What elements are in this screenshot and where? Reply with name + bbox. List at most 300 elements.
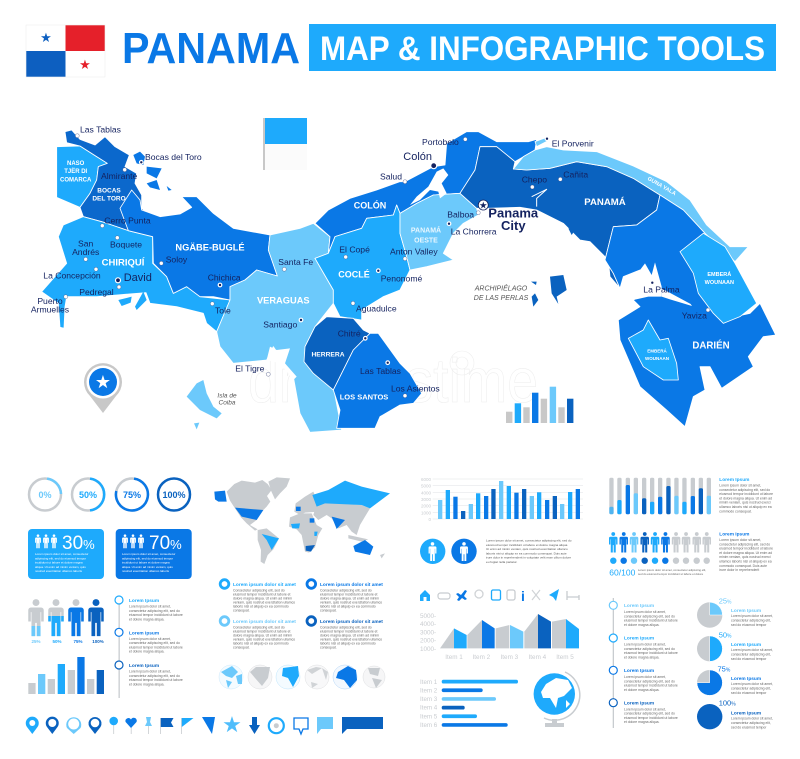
city labels: Aguadulce — [356, 304, 397, 314]
province labels: DARIÉN — [692, 341, 730, 352]
legend 3: laboris nisi ut aliquip ex ea commodo — [233, 642, 289, 646]
text block: people: minim veniam, quis nostrud exerci — [719, 555, 771, 559]
timeline right: eiusmod tempor incididunt ut labore — [624, 651, 678, 655]
province: Cocle — [315, 205, 410, 320]
city labels: Colón — [403, 151, 432, 163]
city labels: Soloy — [166, 255, 188, 265]
horizontal bar chart: Item 2 — [420, 688, 438, 694]
city labels: Yaviza — [682, 311, 707, 321]
pie 75: consectetur adipiscing elit, — [731, 687, 771, 691]
panel: 70 percent: Lorem ipsum dolor sit amet, consectetur — [122, 552, 175, 556]
pie 75 — [697, 664, 773, 695]
text block: people: ullamco laboris nisi ut aliquip ex ea — [719, 560, 772, 564]
icon: light speech bubble — [317, 717, 333, 734]
province: Ngabe-Bugle — [120, 190, 277, 300]
timeline right: Lorem Ipsum — [624, 700, 654, 706]
legend 2 — [307, 580, 383, 612]
globe 4 — [305, 665, 329, 689]
title banner: map and infographic tools: MAP & INFOGRAPHIC TOOLS — [320, 30, 765, 68]
pie 75: Lorem ipsum dolor sit amet, — [731, 682, 773, 686]
pie 100: Lorem Ipsum — [731, 710, 761, 716]
legend 4: laboris nisi ut aliquip ex ea commodo — [320, 642, 376, 646]
city labels: DE LAS PERLAS — [474, 295, 529, 302]
capital marker: Panama City: ★ — [479, 200, 488, 212]
province labels: NGÄBE-BUGLÉ — [175, 243, 245, 253]
legend 1: consequat. — [233, 608, 250, 612]
city labels: Boquete — [110, 239, 142, 249]
legend 1: dolore magna aliqua. Ut enim ad minim — [233, 596, 292, 600]
icon: pin 4 — [88, 717, 101, 734]
timeline right: eiusmod tempor incididunt ut labore — [624, 619, 678, 623]
column chart top middle: 3000 — [421, 497, 431, 502]
timeline right: eiusmod tempor incididunt ut labore — [624, 684, 678, 688]
islands — [118, 152, 575, 429]
text block: capsule bars: ullamco laboris nisi ut aliquip ex ea — [719, 505, 772, 509]
timeline left: Lorem ipsum dolor sit amet, — [129, 670, 171, 674]
legend 4: veniam, quis nostrud exercitation ullamco — [320, 638, 382, 642]
timeline left: eiusmod tempor incididunt ut labore — [129, 678, 183, 682]
text block: capsule bars: Lorem Ipsum — [719, 477, 749, 483]
people percentage chart: 75% — [73, 639, 83, 644]
timeline left: et dolore magna aliqua. — [129, 682, 164, 686]
horizontal bar chart: Item 3 — [420, 696, 438, 703]
city labels: Chepo — [522, 174, 547, 184]
city labels: Chitré — [338, 329, 361, 339]
city labels: ARCHIPIÉLAGO — [474, 284, 528, 293]
timeline left: Lorem ipsum dolor sit amet, — [129, 604, 171, 608]
province labels: BOCAS — [97, 188, 121, 195]
timeline left: consectetur adipiscing elit, sed do — [129, 641, 180, 645]
icon: pin 2 — [46, 717, 59, 734]
icon: round pin — [109, 717, 118, 734]
icon: push pin — [145, 717, 152, 734]
flag of Panama: ★ — [40, 30, 52, 45]
panel: 30 percent: adipiscing elit, sed do eiusmod tempor — [35, 556, 86, 560]
city labels: Las Tablas — [360, 366, 401, 376]
province: Los Santos — [333, 333, 422, 428]
city labels: Las Tablas — [80, 125, 121, 135]
legend 2: veniam, quis nostrud exercitation ullamco — [320, 600, 382, 604]
icon: pin 3 — [66, 717, 81, 734]
horizontal bar chart: Item 1 — [420, 679, 438, 686]
text block beside circle icons — [486, 538, 572, 564]
pie 75: Lorem Ipsum — [731, 676, 761, 682]
ring 0% — [29, 478, 61, 510]
pie 25 — [697, 596, 773, 628]
area chart: Item 1 — [445, 654, 463, 661]
legend 4: Consectetur adipiscing elit, sed do — [320, 626, 372, 630]
text block: people: Lorem Ipsum — [719, 532, 749, 538]
timeline right: consectetur adipiscing elit, sed do — [624, 679, 675, 683]
city labels: Isla de — [217, 392, 237, 399]
city labels — [31, 125, 707, 407]
timeline right: consectetur adipiscing elit, sed do — [624, 614, 675, 618]
pie 25: 25% — [719, 596, 732, 606]
icon: pennant down — [202, 717, 215, 734]
text block: capsule bars: consectetur adipiscing elit, sed do — [719, 488, 770, 492]
legend 1: Consectetur adipiscing elit, sed do — [233, 588, 285, 592]
city labels: La Palma — [643, 285, 680, 295]
province labels: GUNA YALA — [646, 176, 677, 197]
legend 1: veniam, quis nostrud exercitation ullamco — [233, 600, 295, 604]
globe 2 — [248, 665, 272, 689]
icon: plane — [456, 590, 467, 601]
pie 25: Lorem Ipsum — [731, 608, 761, 614]
legend 2: Lorem ipsum dolor sit amet — [320, 582, 383, 588]
city labels: La Chorrera — [451, 226, 497, 236]
pie 75: 75% — [718, 664, 731, 674]
city labels: El Tigre — [235, 364, 265, 374]
timeline left — [115, 596, 183, 698]
pie 50: sed do eiusmod tempor — [731, 657, 767, 661]
pie 25: Lorem ipsum dolor sit amet, — [731, 614, 773, 618]
ring 100% — [158, 478, 190, 510]
text block: capsule bars: commodo consequat. — [719, 509, 752, 513]
city labels: David — [124, 272, 152, 284]
city labels: Chichica — [208, 272, 241, 282]
province: Chiriqui — [42, 217, 230, 332]
province labels: CHIRIQUÍ — [102, 258, 145, 269]
title: PANAMA: PANAMA — [122, 24, 300, 73]
pie 50: Lorem ipsum dolor sit amet, — [731, 648, 773, 652]
column chart top middle — [421, 477, 583, 522]
legend items under world map — [220, 580, 383, 650]
timeline right: Lorem Ipsum — [624, 603, 654, 609]
flag of Panama: ★ — [79, 57, 91, 72]
area chart — [420, 613, 579, 661]
timeline right: et dolore magna aliqua. — [624, 623, 659, 627]
province: Panama Oeste — [400, 193, 478, 270]
province labels: HERRERA — [311, 352, 345, 359]
horizontal bar chart: Item 5 — [420, 714, 438, 720]
city labels: Santiago — [263, 320, 297, 330]
watermark: dreamstime — [248, 347, 538, 416]
province: Darien — [605, 195, 776, 427]
timeline right: Lorem ipsum dolor sit amet, — [624, 707, 666, 711]
province: Colon — [315, 132, 537, 253]
area chart: Item 3 — [501, 654, 519, 661]
icon: star: ★ — [222, 712, 242, 737]
icon: cutlery — [532, 590, 540, 600]
column chart top middle: 0 — [428, 517, 431, 522]
legend 4: Lorem ipsum dolor sit amet — [320, 619, 383, 625]
city markers — [64, 134, 710, 398]
city labels: El Copé — [339, 245, 370, 255]
capsule bars — [609, 478, 711, 514]
legend 1: laboris nisi ut aliquip ex ea commodo — [233, 604, 289, 608]
text block: people: commodo consequat. Duis aute — [719, 564, 767, 568]
timeline left: consectetur adipiscing elit, sed do — [129, 674, 180, 678]
world map — [214, 477, 390, 564]
pie 50: Lorem Ipsum — [731, 642, 761, 648]
people percentage chart: 25% — [31, 639, 41, 644]
icon: train — [475, 590, 483, 598]
timeline left: et dolore magna aliqua. — [129, 617, 164, 621]
ring 50% — [72, 478, 104, 510]
legend 3: eiusmod tempor incididunt ut labore et — [233, 630, 291, 634]
legend 3: consequat. — [233, 646, 250, 650]
city labels: San — [78, 239, 94, 249]
icon: pin 1 — [26, 717, 39, 734]
province labels: VERAGUAS — [257, 295, 310, 305]
horizontal bar chart: Item 6 — [420, 722, 438, 729]
province labels: OESTE — [414, 237, 438, 244]
legend 4 — [307, 617, 383, 650]
legend 2: Consectetur adipiscing elit, sed do — [320, 588, 372, 592]
panel: 30 percent — [28, 529, 104, 579]
column chart top middle: 2000 — [421, 504, 431, 508]
pie 100: 100% — [719, 698, 736, 708]
city labels: Los Asientos — [391, 384, 440, 394]
area chart: Item 2 — [473, 654, 491, 661]
text block: capsule bars: eiusmod tempor incididunt ut labore — [719, 492, 773, 496]
city labels: Cerro Punta — [104, 215, 151, 225]
panel: 30 percent: 30% — [62, 533, 95, 554]
province labels: COLÓN — [354, 199, 386, 210]
inland water — [267, 168, 692, 380]
legend 2: dolore magna aliqua. Ut enim ad minim — [320, 596, 379, 600]
ring 75%: 75% — [123, 490, 141, 500]
area chart: 3000- — [420, 629, 436, 636]
horizontal bar chart: Item 4 — [420, 705, 438, 712]
globe 3 — [276, 665, 300, 689]
area chart: 2000- — [420, 637, 436, 644]
timeline left: Lorem Ipsum — [129, 663, 159, 669]
pie 75: sed do eiusmod tempor — [731, 691, 767, 695]
text block: capsule bars: minim veniam, quis nostrud exerci — [719, 501, 771, 505]
panel: 70 percent: 70% — [149, 533, 182, 554]
pie 100 — [697, 698, 773, 730]
area chart: Item 5 — [556, 654, 574, 661]
timeline right: et dolore magna aliqua. — [624, 720, 659, 724]
legend 3: veniam, quis nostrud exercitation ullamco — [233, 638, 295, 642]
panel: 30 percent: nostrud exercitation ullamco laboris — [35, 569, 83, 573]
area chart: 5000- — [420, 613, 436, 620]
legend 2: consequat. — [320, 608, 337, 612]
icon: heart pin — [125, 718, 137, 734]
timeline right: consectetur adipiscing elit, sed do — [624, 647, 675, 651]
text block beside circle icons: laboris nisi ut aliquip ex ea commodo consequat. Duis aute — [486, 551, 567, 555]
timeline left: eiusmod tempor incididunt ut labore — [129, 645, 183, 649]
icon: house — [420, 590, 430, 601]
panel: 30 percent: incididunt ut labore et dolore magna — [35, 561, 83, 565]
timeline right — [609, 598, 678, 728]
city labels: Armuelles — [31, 305, 69, 315]
panel: 70 percent: nostrud exercitation ullamco laboris — [122, 569, 170, 573]
text block: people — [719, 532, 773, 572]
people 60/100: Lorem ipsum dolor sit amet, consectetur adipiscing elit, — [638, 568, 706, 572]
text block beside circle icons: Ut enim ad minim veniam, quis nostrud exercitation ullamco — [486, 547, 568, 551]
legend 3: Consectetur adipiscing elit, sed do — [233, 626, 285, 630]
legend 4: eiusmod tempor incididunt ut labore et — [320, 630, 378, 634]
province labels: EMBERÁ — [707, 271, 731, 278]
people percentage chart — [28, 599, 104, 644]
province: Guna Yala — [513, 147, 748, 262]
text block beside circle icons: Lorem ipsum dolor sit amet, consectetur adipiscing elit, sed do — [486, 538, 572, 542]
icon: wide speech bubble — [342, 717, 383, 734]
icon: square speech bubble — [294, 718, 308, 734]
area chart: 4000- — [420, 621, 436, 628]
timeline right: Lorem ipsum dolor sit amet, — [624, 610, 666, 614]
people percentage chart: 50% — [52, 639, 62, 644]
province labels: WOUNAAN — [705, 280, 734, 286]
city labels: Santa Fe — [278, 257, 313, 267]
text block: people: et dolore magna aliqua. Ut enim ad — [719, 551, 772, 555]
pie 50: 50% — [719, 630, 732, 640]
province labels: EMBERÁ — [647, 348, 667, 354]
icon: pennant — [181, 718, 194, 734]
city labels: Portobelo — [422, 137, 459, 147]
icon: bus — [492, 590, 500, 600]
panel: 30 percent: Lorem ipsum dolor sit amet, consectetur — [35, 552, 88, 556]
globe 6 — [363, 666, 385, 688]
people 60/100: sed do eiusmod tempor incididunt ut labore et dolore — [638, 572, 704, 576]
icon: blue flag marker — [263, 118, 307, 170]
icon: flag — [160, 718, 174, 734]
timeline left: eiusmod tempor incididunt ut labore — [129, 613, 183, 617]
province labels: NASO — [67, 161, 85, 167]
panel: 70 percent: incididunt ut labore et dolore magna — [122, 561, 170, 565]
timeline right: Lorem ipsum dolor sit amet, — [624, 675, 666, 679]
city labels: Anton Valley — [390, 246, 438, 256]
icon: desk globe — [534, 672, 580, 727]
panel: 70 percent — [116, 529, 192, 579]
pie 25: consectetur adipiscing elit, — [731, 619, 771, 623]
timeline right: et dolore magna aliqua. — [624, 655, 659, 659]
panel: 70 percent: aliqua. Ut enim ad minim veniam, quis — [122, 565, 173, 569]
people 60/100 — [609, 532, 711, 578]
city labels: Pedregal — [79, 287, 114, 297]
pie 100: consectetur adipiscing elit, — [731, 721, 771, 725]
text block: people: eiusmod tempor incididunt ut labore — [719, 547, 773, 551]
province: Panama — [460, 147, 660, 288]
ring 100%: 100% — [162, 490, 186, 500]
bar chart bottom-left — [28, 657, 104, 694]
icon: target circle — [269, 718, 284, 733]
small bar chart on map — [506, 387, 573, 423]
timeline right: consectetur adipiscing elit, sed do — [624, 712, 675, 716]
icon: car — [438, 593, 450, 599]
province: Herrera — [304, 317, 370, 390]
column chart top middle: 6000 — [421, 477, 431, 482]
column chart top middle: 4000 — [421, 490, 431, 495]
text block: capsule bars — [719, 477, 773, 513]
pie 50: consectetur adipiscing elit, — [731, 653, 771, 657]
province labels: DEL TORO — [92, 196, 126, 203]
city labels: Almirante — [101, 171, 138, 181]
travel icons row — [420, 588, 579, 604]
flag of Panama — [26, 25, 105, 77]
timeline right: eiusmod tempor incididunt ut labore — [624, 716, 678, 720]
city labels: Panama — [488, 205, 539, 220]
city labels: Cañita — [563, 169, 588, 179]
icon: arrow down — [249, 717, 260, 734]
text block: capsule bars: Lorem ipsum dolor sit amet, — [719, 484, 761, 488]
icon: tram — [507, 590, 515, 600]
province labels — [60, 161, 734, 401]
text block beside circle icons: eu fugiat nulla pariatur. — [486, 560, 517, 564]
pie charts — [697, 596, 773, 730]
province: Embera Wounaan west — [628, 320, 678, 380]
area chart: Item 4 — [529, 654, 547, 661]
city labels: Penonomé — [381, 274, 422, 284]
progress rings — [29, 478, 190, 510]
timeline left: Lorem Ipsum — [129, 630, 159, 636]
people 60/100: 60/100 — [609, 568, 636, 578]
city labels: Andrés — [72, 247, 99, 257]
text block beside circle icons: irure dolor in reprehenderit in voluptate velit esse cillum dolore — [486, 556, 571, 560]
pie 50 — [697, 630, 773, 661]
city labels: Tole — [215, 305, 231, 315]
marker icons row — [26, 712, 383, 737]
timeline left: Lorem Ipsum — [129, 598, 159, 604]
people percentage chart: 100% — [92, 639, 104, 644]
province labels: LOS SANTOS — [340, 392, 388, 401]
province labels: TJËR DI — [64, 168, 88, 175]
area chart: 1000- — [420, 646, 436, 653]
text block: capsule bars: et dolore magna aliqua. Ut enim ad — [719, 496, 772, 500]
pie 100: Lorem ipsum dolor sit amet, — [731, 716, 773, 720]
panel: 70 percent: adipiscing elit, sed do eiusmod tempor — [122, 556, 173, 560]
text block beside circle icons: eiusmod tempor incididunt ut labore et dolore magna aliqua — [486, 543, 568, 547]
timeline left: consectetur adipiscing elit, sed do — [129, 609, 180, 613]
city labels: Balboa — [447, 209, 474, 219]
city labels: Coiba — [219, 400, 236, 407]
legend 3: Lorem ipsum dolor sit amet — [233, 619, 296, 625]
timeline left: et dolore magna aliqua. — [129, 650, 164, 654]
province: Embera Wounaan east — [680, 233, 757, 323]
legend 3: dolore magna aliqua. Ut enim ad minim — [233, 634, 292, 638]
legend 4: dolore magna aliqua. Ut enim ad minim — [320, 634, 379, 638]
timeline right: Lorem Ipsum — [624, 668, 654, 674]
text block: people: Lorem ipsum dolor sit amet, — [719, 538, 761, 542]
pie 100: sed do eiusmod tempor — [731, 726, 767, 730]
pie 25: sed do eiusmod tempor — [731, 623, 767, 627]
city labels: City — [501, 218, 526, 233]
icon: info: i — [521, 588, 525, 604]
ring 75% — [116, 478, 148, 510]
legend 1 — [220, 580, 296, 612]
legend 4: consequat. — [320, 646, 337, 650]
province labels: WOUNAAN — [645, 356, 669, 361]
legend 1: Lorem ipsum dolor sit amet — [233, 582, 296, 588]
ring 50%: 50% — [79, 490, 97, 500]
ring 0%: 0% — [38, 490, 52, 500]
timeline right: et dolore magna aliqua. — [624, 688, 659, 692]
icon: location pin with star: ★ — [95, 372, 111, 392]
icon: paper plane — [549, 589, 559, 601]
icon: bed — [567, 591, 579, 600]
province: Naso Tjer Di — [57, 146, 107, 207]
province labels: COMARCA — [60, 178, 92, 184]
text block: people: consectetur adipiscing elit, sed do — [719, 542, 770, 546]
column chart top middle: 1000 — [421, 510, 431, 515]
male and female circle icons — [420, 539, 477, 564]
province labels: PANAMÁ — [411, 226, 441, 235]
city labels: Bocas del Toro — [145, 152, 202, 162]
map of Panama — [42, 130, 776, 432]
timeline left: Lorem ipsum dolor sit amet, — [129, 637, 171, 641]
column chart top middle: 5000 — [421, 484, 431, 488]
globe 5 — [333, 665, 357, 689]
panel: 30 percent: aliqua. Ut enim ad minim veniam, quis — [35, 565, 86, 569]
city labels: El Porvenir — [552, 139, 594, 149]
city labels: Salud — [380, 171, 402, 181]
timeline right: Lorem ipsum dolor sit amet, — [624, 642, 666, 646]
legend 3 — [220, 617, 296, 650]
text block: people: irure dolor in reprehenderit — [719, 568, 759, 572]
province labels: PANAMÁ — [584, 196, 626, 208]
